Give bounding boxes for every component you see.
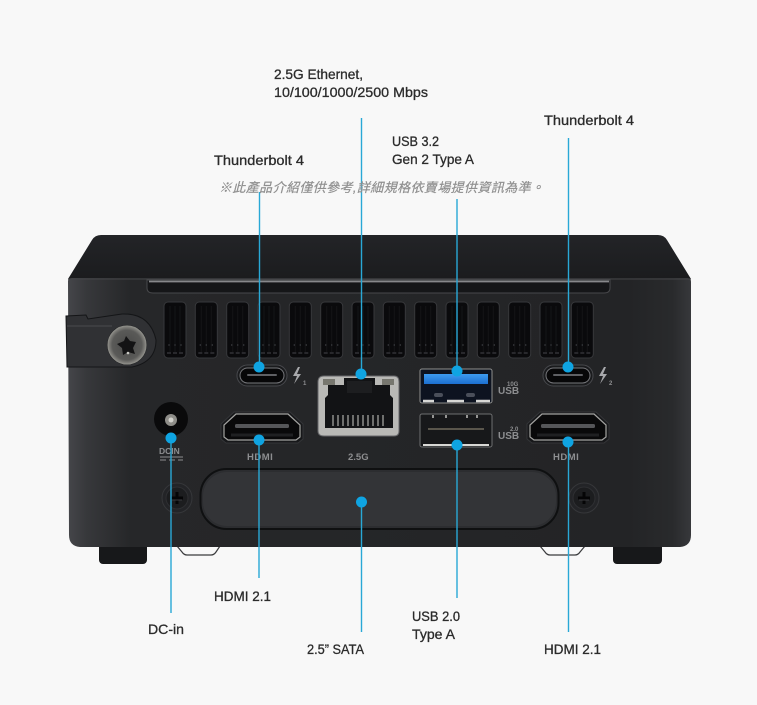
silkscreen: DCIN [159,446,183,460]
leader: 2.5 SATA [356,496,367,632]
leader lines and dots [166,118,574,632]
label: USB 2.0 Type A: USB 2.0 [412,608,460,624]
label: USB 10G: USB [498,386,519,397]
label: Thunderbolt 4 right: Thunderbolt 4 [544,112,634,128]
bottom clips [177,546,585,555]
label: USB 3.2 Gen 2 Type A: USB 3.2 [392,133,439,149]
label: USB 2.0 Type A: Type A [412,626,456,642]
label: 2.5 inch SATA: 2.5” SATA [307,641,365,657]
top surface [68,235,691,279]
label: HDMI 2.1 right: HDMI 2.1 [544,641,601,657]
label: 2.5G Ethernet: 2.5G Ethernet, [274,66,363,82]
leader: HDMI 2.1 left [254,434,264,578]
port: Thunderbolt 4 left [237,365,307,387]
label: USB 3.2 Gen 2 Type A [392,133,475,167]
security bracket and screw [66,314,156,367]
silkscreen: HDMI right: HDMI [553,452,579,463]
port: 2.5G Ethernet [318,376,399,436]
leader: 2.5G Ethernet [356,118,366,380]
leader: Thunderbolt 4 left [254,192,264,372]
port: HDMI left [221,412,303,443]
port: Thunderbolt 4 right [543,365,613,387]
rear lip slot [147,280,610,293]
label: HDMI 2.1 left: HDMI 2.1 [214,588,271,604]
port: HDMI right [527,412,609,443]
SATA cover panel [200,469,558,529]
leader: DC-in [166,432,176,613]
screw right [569,483,599,513]
port: USB 3.2 Gen 2 Type A [420,369,492,403]
label: USB 2.0 Type A [412,608,460,642]
rubber feet [99,540,662,564]
label: DC-in: DC-in [148,621,184,637]
label: 2.5G Ethernet [274,66,428,100]
label: Thunderbolt 4 left: Thunderbolt 4 [214,152,304,168]
port: Thunderbolt 4 right: 2 [609,381,613,387]
silkscreen: DCIN: DCIN [159,446,180,456]
leader: HDMI 2.1 right [562,436,574,632]
silkscreen: 2.5G: 2.5G [348,452,369,463]
label: 2.5G Ethernet: 10/100/1000/2500 Mbps [274,84,428,100]
port: USB 2.0 Type A [420,414,492,447]
label: USB 3.2 Gen 2 Type A: Gen 2 Type A [392,151,475,167]
silkscreen: HDMI left: HDMI [247,452,273,463]
disclaimer note: ※此產品介紹僅供參考,詳細規格依賣場提供資訊為準。 [219,180,544,195]
leader: USB 2.0 [452,440,462,598]
mini PC chassis [66,235,691,564]
port: DC-in jack [154,402,188,436]
label: USB 10G: 10G [507,382,519,388]
leader: Thunderbolt 4 right [562,138,574,372]
ventilation slots [164,302,593,358]
label: USB 2.0: USB [498,431,519,442]
front face [68,278,691,547]
port: Thunderbolt 4 left: 1 [303,381,307,387]
leader: USB 3.2 [452,199,462,376]
screw left [162,483,192,513]
label: USB 2.0: 2.0 [510,427,519,433]
